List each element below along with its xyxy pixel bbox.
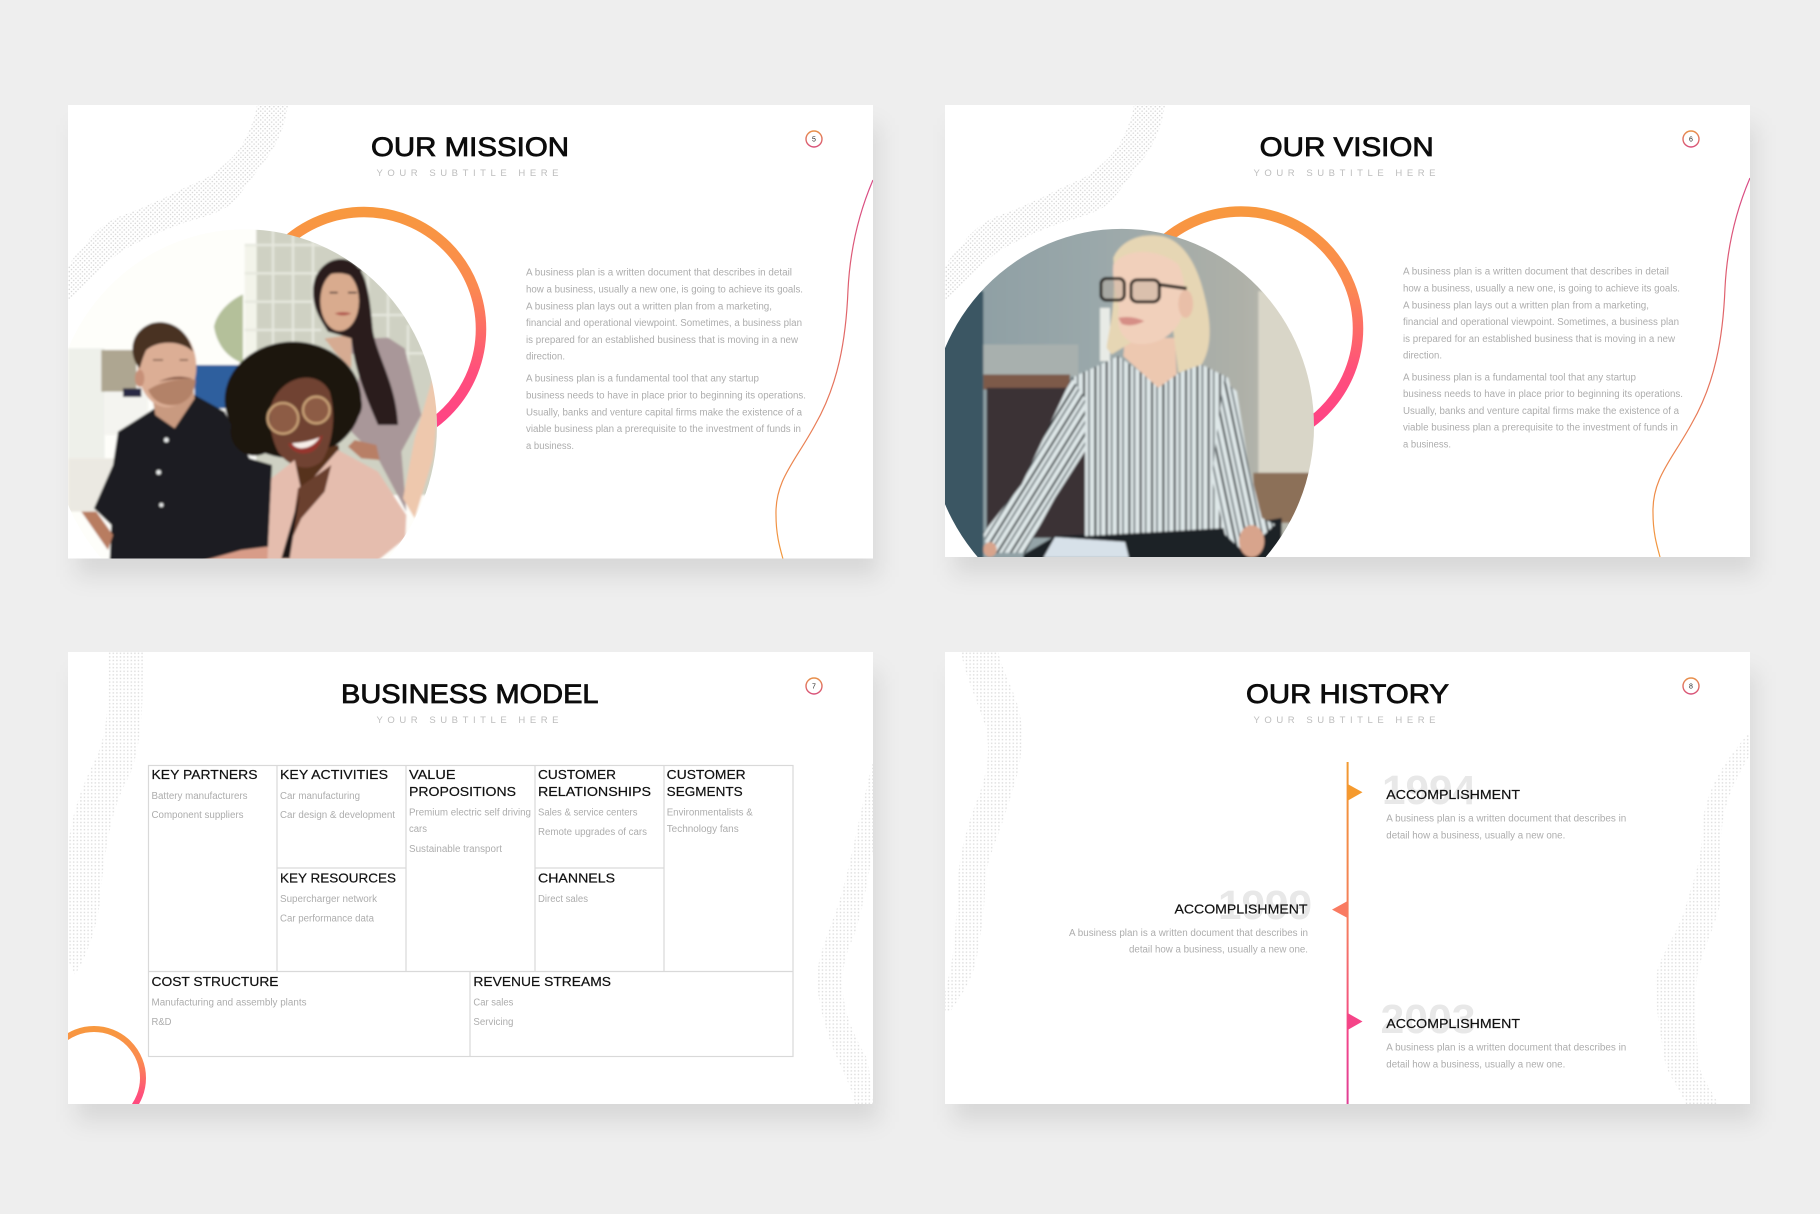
small gradient ring xyxy=(45,1029,143,1127)
value propositions: VALUE xyxy=(409,767,456,782)
milestone 2003: 2003 xyxy=(1380,996,1476,1042)
milestone 2003 xyxy=(1348,996,1626,1070)
key partners xyxy=(152,767,258,821)
page number: 5 xyxy=(812,136,816,144)
title: OUR HISTORY xyxy=(1246,679,1449,709)
body text: A business plan is a fundamental tool that any startup xyxy=(526,374,759,385)
key resources xyxy=(280,871,396,925)
value propositions: cars xyxy=(409,824,427,835)
title: OUR MISSION xyxy=(371,132,569,162)
body text: A business plan is a fundamental tool that any startup xyxy=(1403,372,1636,383)
body text: Usually, banks and venture capital firms make the existence of a xyxy=(526,407,802,418)
key partners: Battery manufacturers xyxy=(152,791,248,802)
blouse xyxy=(1071,356,1231,538)
dotted wave left xyxy=(945,652,1022,1012)
body text: a business. xyxy=(526,441,574,452)
title: OUR VISION xyxy=(1260,132,1434,162)
milestone 1994: ACCOMPLISHMENT xyxy=(1386,787,1520,802)
page number xyxy=(806,678,822,694)
body text: business needs to have in place prior to beginning its operations. xyxy=(1403,389,1683,400)
dotted wave xyxy=(68,105,288,300)
thin curve xyxy=(1653,178,1750,557)
standing woman xyxy=(350,336,422,512)
panel: business model xyxy=(45,652,873,1127)
milestone 2003: ACCOMPLISHMENT xyxy=(1386,1016,1520,1031)
dotted wave right xyxy=(1655,732,1750,1104)
revenue streams: REVENUE STREAMS xyxy=(473,974,611,989)
page number: 7 xyxy=(812,684,816,690)
man xyxy=(94,395,272,562)
dotted wave left xyxy=(68,652,143,975)
panel: our mission xyxy=(51,105,873,565)
body text: Usually, banks and venture capital firms make the existence of a xyxy=(1403,406,1679,417)
channels: CHANNELS xyxy=(538,871,615,886)
channels xyxy=(538,871,615,905)
hair, face xyxy=(1123,338,1177,388)
key resources: Supercharger network xyxy=(280,894,378,905)
cost structure: R&D xyxy=(152,1017,172,1028)
body text: viable business plan a prerequisite to the investment of funds in xyxy=(526,424,801,435)
laptop, hands xyxy=(1043,537,1129,558)
panel shadows xyxy=(76,125,1756,1122)
value propositions: Premium electric self driving xyxy=(409,808,531,819)
body text: A business plan lays out a written plan from a marketing, xyxy=(526,301,772,312)
page number xyxy=(1683,131,1699,147)
subtitle: YOUR SUBTITLE HERE xyxy=(1254,168,1436,179)
body text: financial and operational viewpoint. Sometimes, a business plan xyxy=(526,318,802,329)
value propositions xyxy=(409,767,531,855)
subtitle: YOUR SUBTITLE HERE xyxy=(1254,715,1436,726)
value propositions: PROPOSITIONS xyxy=(409,784,516,799)
body text: how a business, usually a new one, is going to achieve its goals. xyxy=(526,285,803,296)
key partners: KEY PARTNERS xyxy=(152,767,258,782)
subtitle: YOUR SUBTITLE HERE xyxy=(376,715,558,726)
milestone 1994: detail how a business, usually a new one. xyxy=(1386,830,1565,841)
body text: A business plan lays out a written plan from a marketing, xyxy=(1403,300,1649,311)
key activities xyxy=(280,767,395,821)
key resources: Car performance data xyxy=(280,914,374,925)
photo: three colleagues xyxy=(68,230,437,558)
body text xyxy=(1403,267,1683,451)
gradient ring xyxy=(1164,206,1364,426)
arm at right xyxy=(403,372,438,518)
milestone 1994: A business plan is a written document that describes in xyxy=(1386,814,1626,825)
customer relationships: RELATIONSHIPS xyxy=(538,784,651,799)
body text: direction. xyxy=(526,352,565,363)
cost structure xyxy=(152,974,306,1028)
milestone 1999: ACCOMPLISHMENT xyxy=(1174,902,1308,917)
customer segments: Environmentalists & xyxy=(667,808,753,819)
milestone 1999: A business plan is a written document that describes in xyxy=(1069,928,1308,939)
milestone 1999: detail how a business, usually a new one. xyxy=(1129,945,1308,956)
seated woman xyxy=(200,547,268,562)
photo: woman with glasses xyxy=(945,228,1314,557)
customer segments: CUSTOMER xyxy=(667,767,746,782)
title: BUSINESS MODEL xyxy=(341,679,598,709)
panel: our vision xyxy=(928,105,1750,564)
key partners: Component suppliers xyxy=(152,810,244,821)
revenue streams xyxy=(473,974,611,1028)
customer segments: SEGMENTS xyxy=(667,784,743,799)
thin curve xyxy=(776,180,873,559)
customer segments xyxy=(667,767,753,835)
dotted wave xyxy=(945,105,1165,300)
revenue streams: Car sales xyxy=(473,998,513,1009)
revenue streams: Servicing xyxy=(473,1017,513,1028)
key activities: Car manufacturing xyxy=(280,791,360,802)
body text xyxy=(526,268,806,452)
page number: 8 xyxy=(1689,684,1693,690)
milestone 1994 xyxy=(1348,767,1626,841)
customer relationships xyxy=(538,767,651,838)
page number: 6 xyxy=(1689,136,1693,144)
customer relationships: CUSTOMER xyxy=(538,767,616,782)
page number xyxy=(1683,678,1699,694)
gradient ring xyxy=(286,206,486,427)
key activities: Car design & development xyxy=(280,810,395,821)
timeline line xyxy=(1347,762,1349,1104)
customer relationships: Remote upgrades of cars xyxy=(538,827,647,838)
key resources: KEY RESOURCES xyxy=(280,871,396,886)
milestone 2003: A business plan is a written document that describes in xyxy=(1386,1043,1626,1054)
milestone 2003: detail how a business, usually a new one. xyxy=(1386,1059,1565,1070)
milestone 1994: 1994 xyxy=(1382,767,1476,813)
subtitle: YOUR SUBTITLE HERE xyxy=(376,168,558,179)
customer segments: Technology fans xyxy=(667,824,739,835)
channels: Direct sales xyxy=(538,894,588,905)
panel: our history xyxy=(945,652,1750,1104)
body text: is prepared for an established business that is moving in a new xyxy=(526,335,799,346)
dotted wave right xyxy=(817,762,873,1104)
body text: direction. xyxy=(1403,351,1442,362)
cost structure: Manufacturing and assembly plants xyxy=(152,998,306,1009)
body text: a business. xyxy=(1403,440,1451,451)
body text: is prepared for an established business that is moving in a new xyxy=(1403,334,1676,345)
value propositions: Sustainable transport xyxy=(409,844,502,855)
table xyxy=(1023,518,1282,561)
milestone 1999 xyxy=(1069,882,1348,956)
cost structure: COST STRUCTURE xyxy=(152,974,279,989)
body text: financial and operational viewpoint. Sometimes, a business plan xyxy=(1403,317,1679,328)
page number xyxy=(806,131,822,147)
customer relationships: Sales & service centers xyxy=(538,808,638,819)
body text: how a business, usually a new one, is going to achieve its goals. xyxy=(1403,284,1680,295)
body text: business needs to have in place prior to beginning its operations. xyxy=(526,390,806,401)
body text: A business plan is a written document that describes in detail xyxy=(1403,267,1669,278)
body text: viable business plan a prerequisite to the investment of funds in xyxy=(1403,423,1678,434)
body text: A business plan is a written document that describes in detail xyxy=(526,268,792,279)
business model canvas table xyxy=(148,766,793,1056)
milestone 1999: 1999 xyxy=(1218,882,1312,928)
key activities: KEY ACTIVITIES xyxy=(280,767,388,782)
